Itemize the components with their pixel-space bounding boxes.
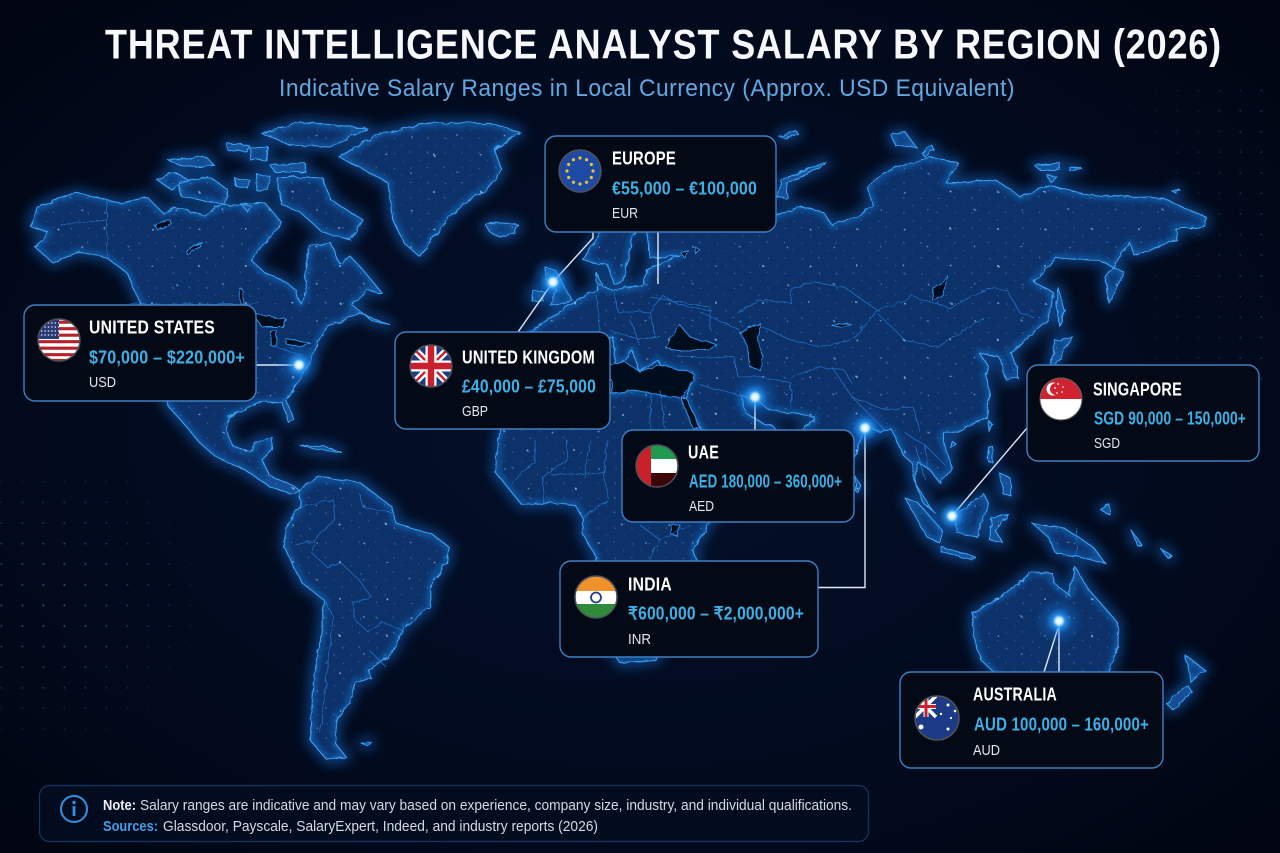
flag: India	[575, 576, 617, 618]
card: Europe: EUROPE	[612, 148, 676, 168]
card: Australia: AUD 100,000 – 160,000+	[974, 714, 1149, 734]
card: Singapore: SINGAPORE	[1093, 380, 1182, 400]
flag: Singapore	[1040, 378, 1082, 420]
card: United Kingdom: UNITED KINGDOM	[462, 348, 595, 368]
card: United States: $70,000 – $220,000+	[89, 348, 245, 368]
note panel: Glassdoor, Payscale, SalaryExpert, Indeed, and industry reports (2026)	[163, 818, 598, 835]
note panel: Sources:	[103, 818, 158, 835]
connector: United Kingdom	[518, 232, 593, 332]
connector: UAE	[754, 397, 756, 430]
card: Europe	[545, 136, 776, 232]
card: Europe: €55,000 – €100,000	[612, 178, 757, 198]
card: United Kingdom: £40,000 – £75,000	[462, 376, 596, 396]
location markers	[275, 258, 1083, 645]
card: India: INR	[628, 631, 651, 648]
card: UAE: AED	[689, 498, 714, 515]
flag: Europe	[559, 150, 601, 192]
card: India: ₹600,000 – ₹2,000,000+	[628, 604, 804, 624]
card: United States: UNITED STATES	[89, 318, 215, 338]
flag: Australia	[915, 696, 959, 740]
connector: India	[818, 428, 865, 588]
connector: Europe	[657, 232, 659, 284]
card: United States: USD	[89, 374, 116, 391]
card: India: INDIA	[628, 574, 672, 594]
flag: United Kingdom	[410, 345, 452, 387]
card: United Kingdom	[395, 332, 610, 429]
card: Australia: AUD	[973, 742, 1000, 759]
connector: United States	[256, 364, 299, 366]
note panel: Salary ranges are indicative and may vary based on experience, company size, industry, and individual qualifications.	[140, 797, 852, 814]
connector: Singapore	[952, 428, 1027, 516]
note panel: Note:	[103, 797, 136, 814]
card: UAE	[622, 430, 854, 522]
flag: UAE	[636, 445, 678, 487]
card: United States	[24, 305, 256, 401]
card: UAE: AED 180,000 – 360,000+	[689, 472, 842, 492]
card: India	[560, 561, 818, 657]
card: UAE: UAE	[688, 442, 719, 462]
icon: info	[61, 796, 87, 822]
world map	[31, 122, 1207, 760]
card: United Kingdom: GBP	[462, 403, 488, 420]
subtitle: Indicative Salary Ranges in Local Currency (Approx. USD Equivalent)	[279, 75, 1015, 102]
card: Singapore	[1027, 365, 1259, 461]
card: Australia	[900, 672, 1163, 768]
card: Europe: EUR	[612, 205, 638, 222]
flag: United States	[38, 319, 80, 361]
note panel	[40, 786, 868, 842]
card: Australia: AUSTRALIA	[973, 684, 1057, 704]
card: Singapore: SGD	[1094, 435, 1120, 452]
connector: Australia	[1044, 621, 1059, 672]
